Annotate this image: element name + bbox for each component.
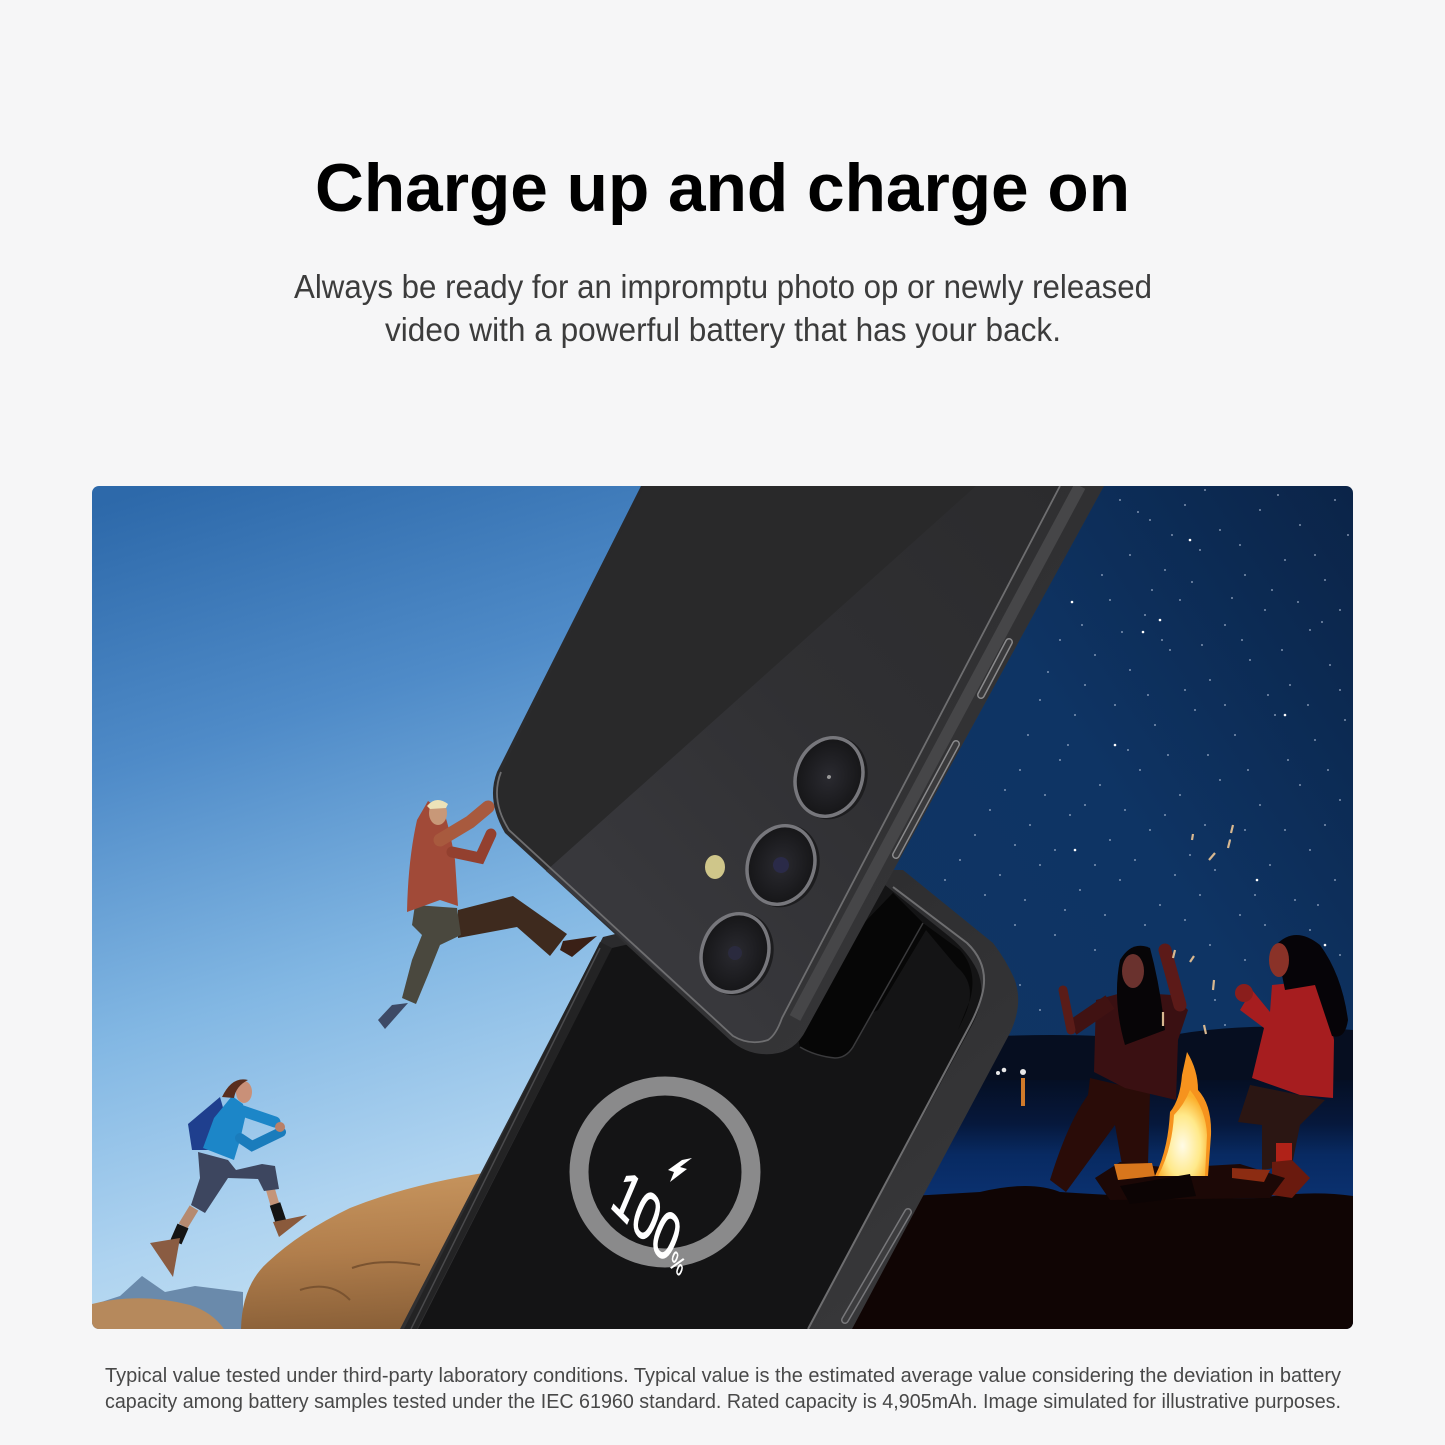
subtitle text block: video with a powerful battery that has your back. [385,311,1061,348]
person: left woman dancing [1050,946,1188,1192]
night sky background [894,486,1353,1329]
campfire [1095,1052,1285,1204]
day sky background [92,486,641,1329]
rear volume button [981,642,1009,695]
shore lights [996,1068,1026,1106]
sparks [1163,825,1233,1034]
charging ring [579,1086,751,1258]
selfie notch recess [801,1014,871,1057]
camera lens 2 [745,824,820,908]
small boulder [92,1298,224,1329]
frame highlight [808,887,984,1329]
footnote: Typical value tested under third-party laboratory conditions. Typical value is the estimated average value considering the deviation in battery [105,1365,1341,1387]
front phone frame [400,870,1018,1329]
title: Charge up and charge on [315,150,1130,226]
person: right woman dancing [1235,935,1348,1198]
footnote: capacity among battery samples tested under the IEC 61960 standard. Rated capacity is 4,905mAh. Image simulated for illustrative purposes. [105,1391,1341,1413]
subtitle text block [294,268,1152,348]
stars [945,490,1348,1025]
rear phone frame [493,486,1104,1054]
camera lens 1 [793,736,868,820]
charging bolt icon [668,1158,692,1182]
front phone, screen side [400,870,1018,1329]
rear frame highlight band [795,486,1080,1018]
person: climber in red hoodie [378,800,597,1029]
big boulder [241,1172,490,1329]
flash [705,855,725,879]
rear phone [493,486,1104,1054]
front phone screen [418,885,981,1329]
camera lens 3 [699,912,774,996]
rear panel light reflection [546,637,919,1042]
panel: photo scene with phones [92,486,1353,1329]
dark ground [840,1186,1353,1329]
lake water [924,1085,1353,1196]
black bezel band [874,924,972,1026]
subtitle text block: Always be ready for an impromptu photo op or newly released [294,268,1152,305]
battery percentage: 100% [604,1154,702,1289]
rear panel edge highlights [497,486,1060,1042]
footnote [105,1365,1341,1413]
person: hiker in blue jacket [150,1079,307,1277]
left frame edge [404,942,612,1329]
far hill [985,1026,1353,1080]
rear panel dark area [497,486,1060,1042]
side button [845,1212,908,1320]
rear power button [896,744,956,855]
far mountains [92,1276,243,1329]
